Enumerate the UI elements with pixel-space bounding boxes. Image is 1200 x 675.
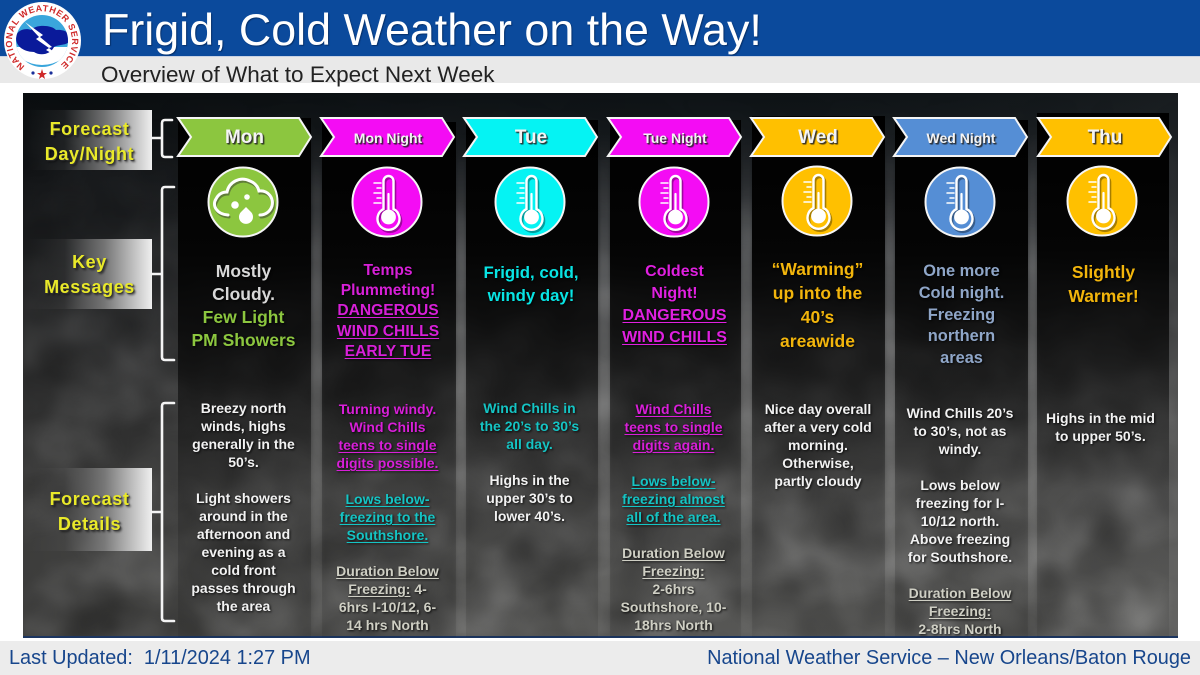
key message: Tue Night [622,263,727,346]
icon: NWS logo: NATIONAL WEATHER SERVICE [6,5,78,70]
details: Wed Night: Above freezing [910,531,1010,547]
arrow label: Wed Night: Wed Night [927,130,995,146]
key message: Tue Night: Night! [651,285,698,302]
arrow: Tue Night [608,118,741,156]
details: Tue: Wind Chills in [483,400,576,416]
details: Wed Night: Duration Below [909,585,1011,601]
panel: forecast background photo [23,93,1178,638]
footer: last updated: Last Updated: 1/11/2024 1:27 PM [9,647,311,669]
key message: Tue: Frigid, cold, [483,263,579,282]
side label text: Forecast Day/Night [45,119,136,168]
details: Tue Night: Southshore, 10- [621,599,726,615]
key message: Mon [191,261,296,350]
details: Tue [480,400,580,524]
details: Mon: generally in the [192,436,295,452]
key message: Mon: Mostly [216,261,271,281]
key message: Wed: up into the [773,283,862,303]
key message: Wed [772,259,863,351]
header band [0,0,1200,83]
key message: Mon Night: DANGEROUS [337,302,439,319]
details: Tue: the 20’s to 30’s [480,418,579,434]
details: Mon Night: teens to single [338,437,437,453]
arrow: Mon [178,118,311,156]
key message: Mon: Cloudy. [212,284,275,304]
details: Tue Night: 2-6hrs [652,581,695,597]
details: Mon Night: Southshore. [347,527,428,543]
arrow: Mon Night [321,118,454,156]
details: Mon: winds, highs [201,418,286,434]
details: Tue Night: digits again. [633,437,714,453]
details: Tue Night: Freezing: [642,563,705,579]
details: Mon: cold front [211,562,276,578]
details: Tue Night: freezing almost [622,491,725,507]
arrow: Tue [464,118,597,156]
details: Tue: upper 30’s to [486,490,573,506]
details: Mon: Light showers [196,490,291,506]
key message: Mon Night: EARLY TUE [345,343,431,360]
key message: Mon: PM Showers [191,330,296,350]
key message: Tue Night: WIND CHILLS [622,329,727,346]
details: Mon Night: Lows below- [346,491,430,507]
side label text: Key Messages [44,252,137,300]
bracket: day/night [152,120,172,157]
footer band [0,641,1200,675]
side label text: Forecast Details: Details [58,514,121,534]
details: Wed Night: Freezing: [929,603,991,619]
icon row [208,166,1138,238]
icon: thermometer Thu [1068,166,1136,236]
key message: Mon Night: Plummeting! [341,282,435,299]
icon: thermometer Tue [496,168,564,236]
key message: Mon Night: WIND CHILLS [337,323,439,340]
subtitle: Overview of What to Expect Next Week [101,62,494,87]
key message: Tue Night: Coldest [645,263,704,280]
side label text: Key Messages: Key [72,252,107,272]
side label text: Forecast Details [50,489,132,534]
key message: Mon Night: Temps [363,262,413,279]
details: Mon Night [336,401,440,633]
icon: rain cloud [208,168,278,236]
key message: Tue: windy day! [488,286,574,305]
side label text: Forecast Day/Night: Day/Night [45,144,134,164]
details: Mon: passes through [191,580,296,596]
details: Wed Night: Lows below [920,477,1000,493]
key message: Thu: Slightly [1072,262,1135,282]
details: Tue: Highs in the [489,472,570,488]
arrow label: Tue Night: Tue Night [643,130,707,146]
key message: Wed Night [919,262,1004,367]
details: Mon Night: Turning windy. [339,401,436,417]
key message: Wed: “Warming” [772,259,863,279]
key message: Wed Night: Freezing [928,306,995,324]
details: Wed [764,401,872,491]
key message: Wed Night: One more [923,262,1000,280]
arrow label: Mon Night: Mon Night [354,130,422,146]
details: Wed: after a very cold [764,419,872,435]
details: Wed: morning. [788,437,848,453]
details: Thu: to upper 50’s. [1055,428,1146,444]
details: Wed Night: to 30’s, not as [914,423,1006,439]
details: Mon Night: Freezing: 4- [348,581,427,597]
details: Wed Night: Wind Chills 20’s [907,405,1013,421]
key message: Wed: 40’s [801,307,834,327]
details: Wed: partly cloudy [774,473,862,489]
arrow label: Thu: Thu [1088,127,1122,148]
day arrows [176,117,1172,157]
icon: thermometer Tue Night [640,168,708,236]
side label text: Key Messages: Messages [44,276,135,296]
key message: Tue Night: DANGEROUS [622,307,726,324]
arrow label: Tue: Tue [515,127,547,148]
key message: Wed: areawide [780,331,855,351]
key message: Tue [483,263,579,305]
arrow label: Wed: Wed [798,127,838,148]
arrow: Wed [751,118,884,156]
details: Mon [191,400,297,614]
arrow: Wed Night [894,118,1027,156]
title: Frigid, Cold Weather on the Way! [102,5,762,55]
details: Tue Night: teens to single [624,419,723,435]
details: Thu: Highs in the mid [1046,410,1155,426]
key message: Mon: Few Light [203,307,284,327]
details: Tue Night: Lows below- [632,473,716,489]
details: Mon: the area [217,598,270,614]
details: Thu [1046,410,1156,446]
key message: Wed Night: areas [940,349,983,367]
key message: Wed Night: Cold night. [919,284,1004,302]
details: Mon: Breezy north [201,400,286,416]
footer: office name: National Weather Service – New Orleans/Baton Rouge [707,647,1191,669]
details: Mon Night: 6hrs I-10/12, 6- [339,599,436,615]
details: Mon: evening as a [201,544,286,560]
details: Wed: Nice day overall [765,401,871,417]
details: Tue: all day. [506,436,553,452]
details: Wed Night: 2-8hrs North [918,621,1002,637]
key message: Thu: Warmer! [1068,286,1139,306]
side label panel: Forecast Day/Night [27,110,152,170]
details: Tue Night: Duration Below [622,545,725,561]
icon: thermometer Wed [782,166,852,236]
details: Wed Night [906,405,1014,637]
side label panel: Key Messages [27,239,152,309]
details: Tue Night [621,401,728,633]
key message: Thu [1068,262,1139,306]
details: Tue Night: all of the area. [626,509,721,525]
details: Mon Night: Duration Below [336,563,439,579]
details: Mon: around in the [199,508,288,524]
details: Mon Night: digits possible. [337,455,438,471]
details: Wed: Otherwise, [782,455,854,471]
side label panel: Forecast Details [27,468,152,551]
bracket: key messages [152,187,174,360]
side label text: Forecast Day/Night: Forecast [50,119,129,139]
brackets [152,118,176,622]
key message: Mon Night [336,262,440,360]
details: Mon Night: Wind Chills [349,419,426,435]
key message: Wed Night: northern [928,327,995,345]
details: Wed Night: for Southshore. [908,549,1012,565]
details: Tue Night: 18hrs North [634,617,713,633]
icon: thermometer Wed Night [926,168,994,236]
details: Mon: afternoon and [197,526,290,542]
details: Mon Night: freezing to the [340,509,435,525]
arrow: Thu [1038,118,1171,156]
details: Wed Night: 10/12 north. [921,513,999,529]
icon: thermometer Mon Night [352,168,422,236]
side label text: Forecast Details: Forecast [50,489,129,509]
details: Tue: lower 40’s. [494,508,565,524]
arrow label: Mon: Mon [225,127,264,148]
details: Mon: 50’s. [228,454,259,470]
details: Wed Night: freezing for I- [916,495,1004,511]
details: Mon Night: 14 hrs North [346,617,429,633]
details: Wed Night: windy. [939,441,981,457]
bracket: forecast details [152,403,174,621]
details: Tue Night: Wind Chills [635,401,712,417]
